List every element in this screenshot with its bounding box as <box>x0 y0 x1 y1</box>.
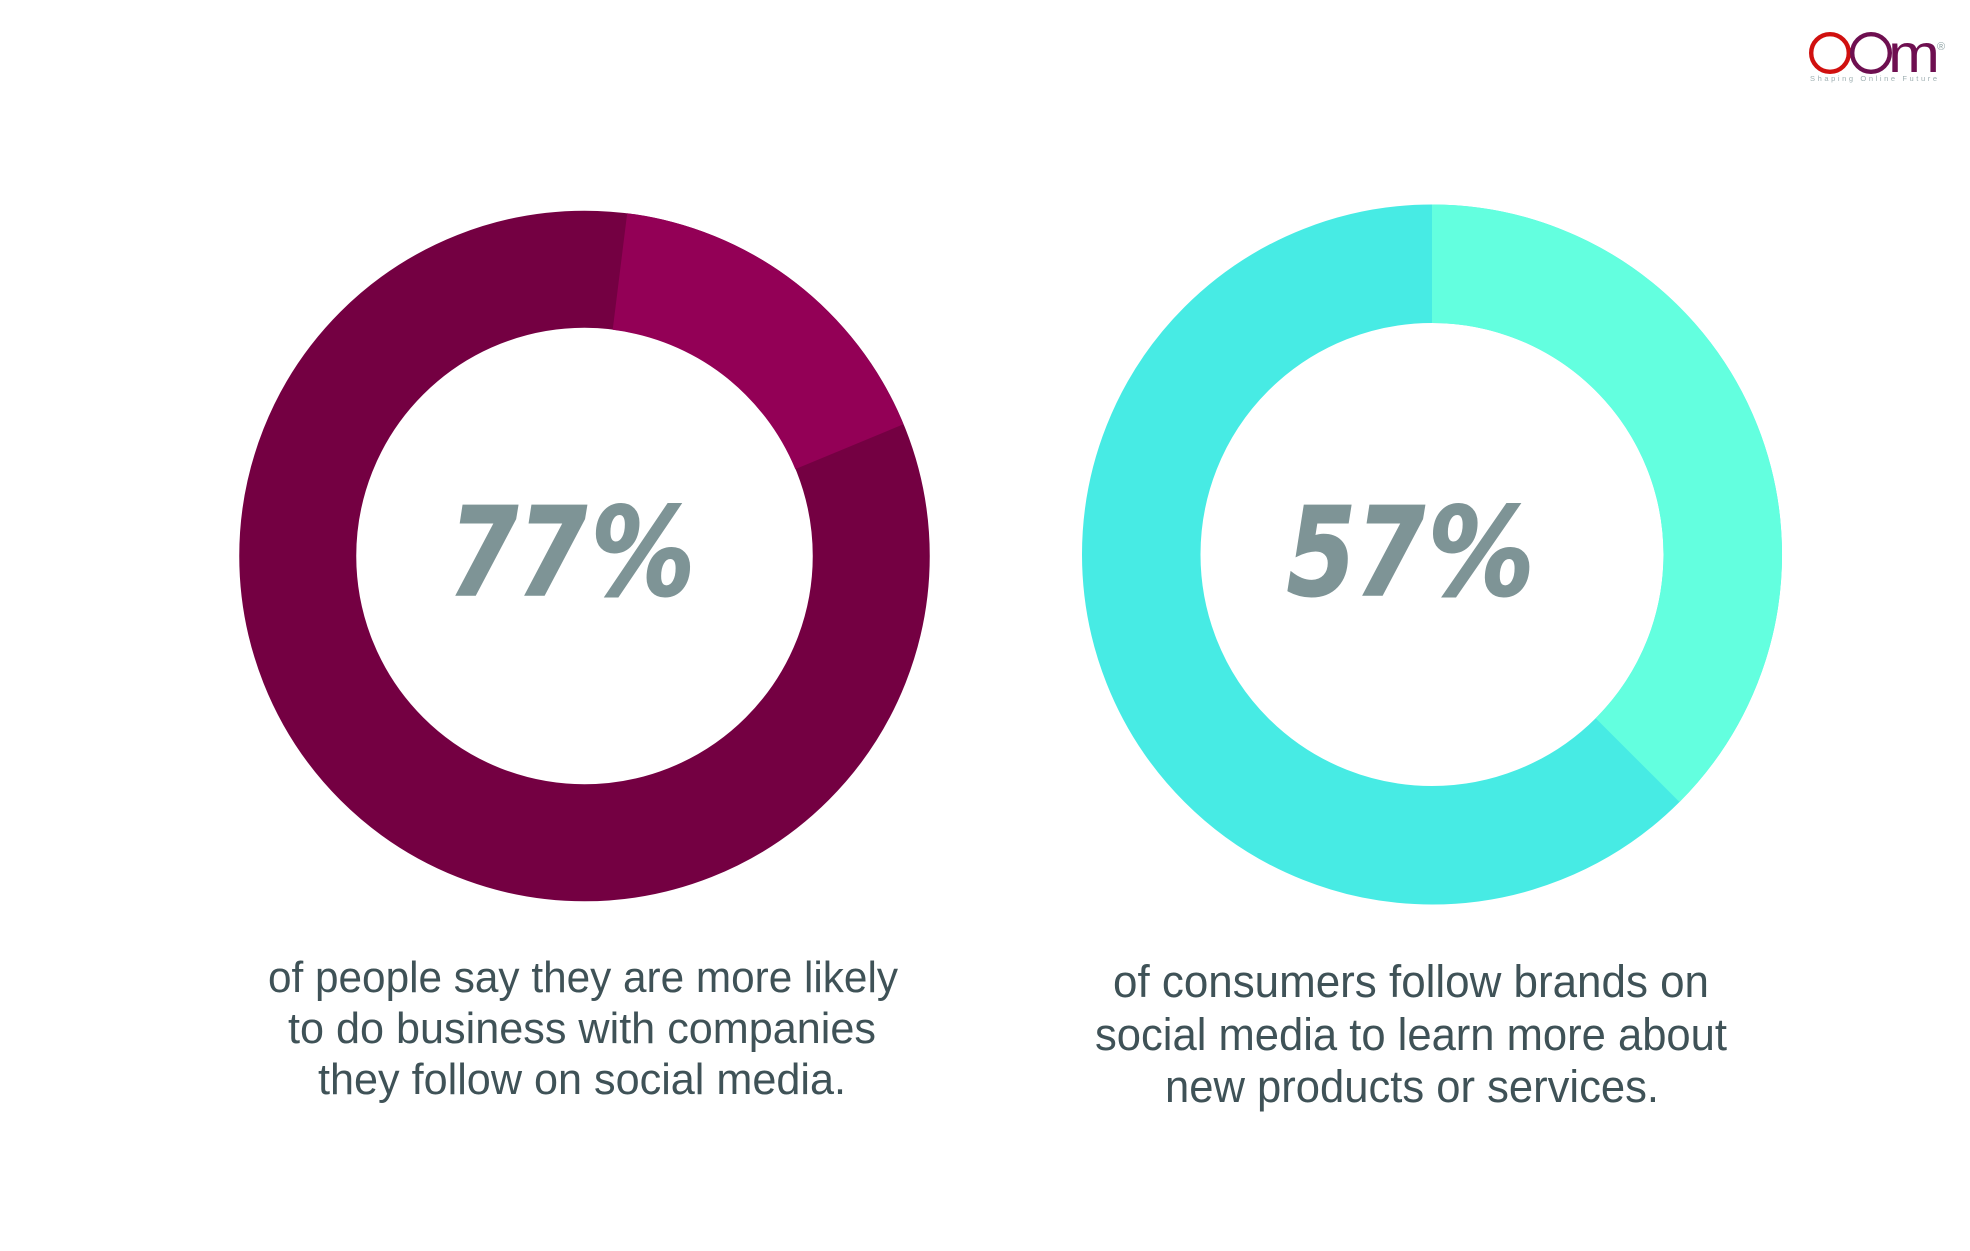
donut value: 77%: % <box>591 482 695 624</box>
caption: 77% statistic: they follow on social media. <box>318 1055 846 1104</box>
donut value: 57%: 57 <box>1287 483 1425 625</box>
donut chart: 77% <box>298 213 903 843</box>
donut chart: 57% <box>1141 204 1782 845</box>
caption: 57% statistic <box>1095 956 1727 1112</box>
caption: 77% statistic <box>268 953 898 1104</box>
donut value: 77% <box>449 482 695 625</box>
caption: 77% statistic: to do business with companies <box>288 1004 876 1053</box>
donut value: 57% <box>1287 482 1534 625</box>
logo: OOm Shaping Online Future: Shaping Online Future <box>1810 74 1937 83</box>
logo: OOm Shaping Online Future: ® <box>1937 41 1945 53</box>
logo: OOm Shaping Online Future <box>1810 24 1945 84</box>
donut value: 77%: 77 <box>449 483 587 625</box>
logo: OOm Shaping Online Future: m <box>1888 24 1940 84</box>
caption: 77% statistic: of people say they are more likely <box>268 953 898 1002</box>
caption: 57% statistic: of consumers follow brands on <box>1113 956 1709 1007</box>
caption: 57% statistic: social media to learn more about <box>1095 1009 1727 1060</box>
donut highlight segment: 77% chart <box>613 213 903 469</box>
donut highlight segment: 57% chart <box>1432 204 1782 802</box>
caption: 57% statistic: new products or services. <box>1165 1061 1659 1112</box>
donut value: 57%: % <box>1428 482 1534 624</box>
